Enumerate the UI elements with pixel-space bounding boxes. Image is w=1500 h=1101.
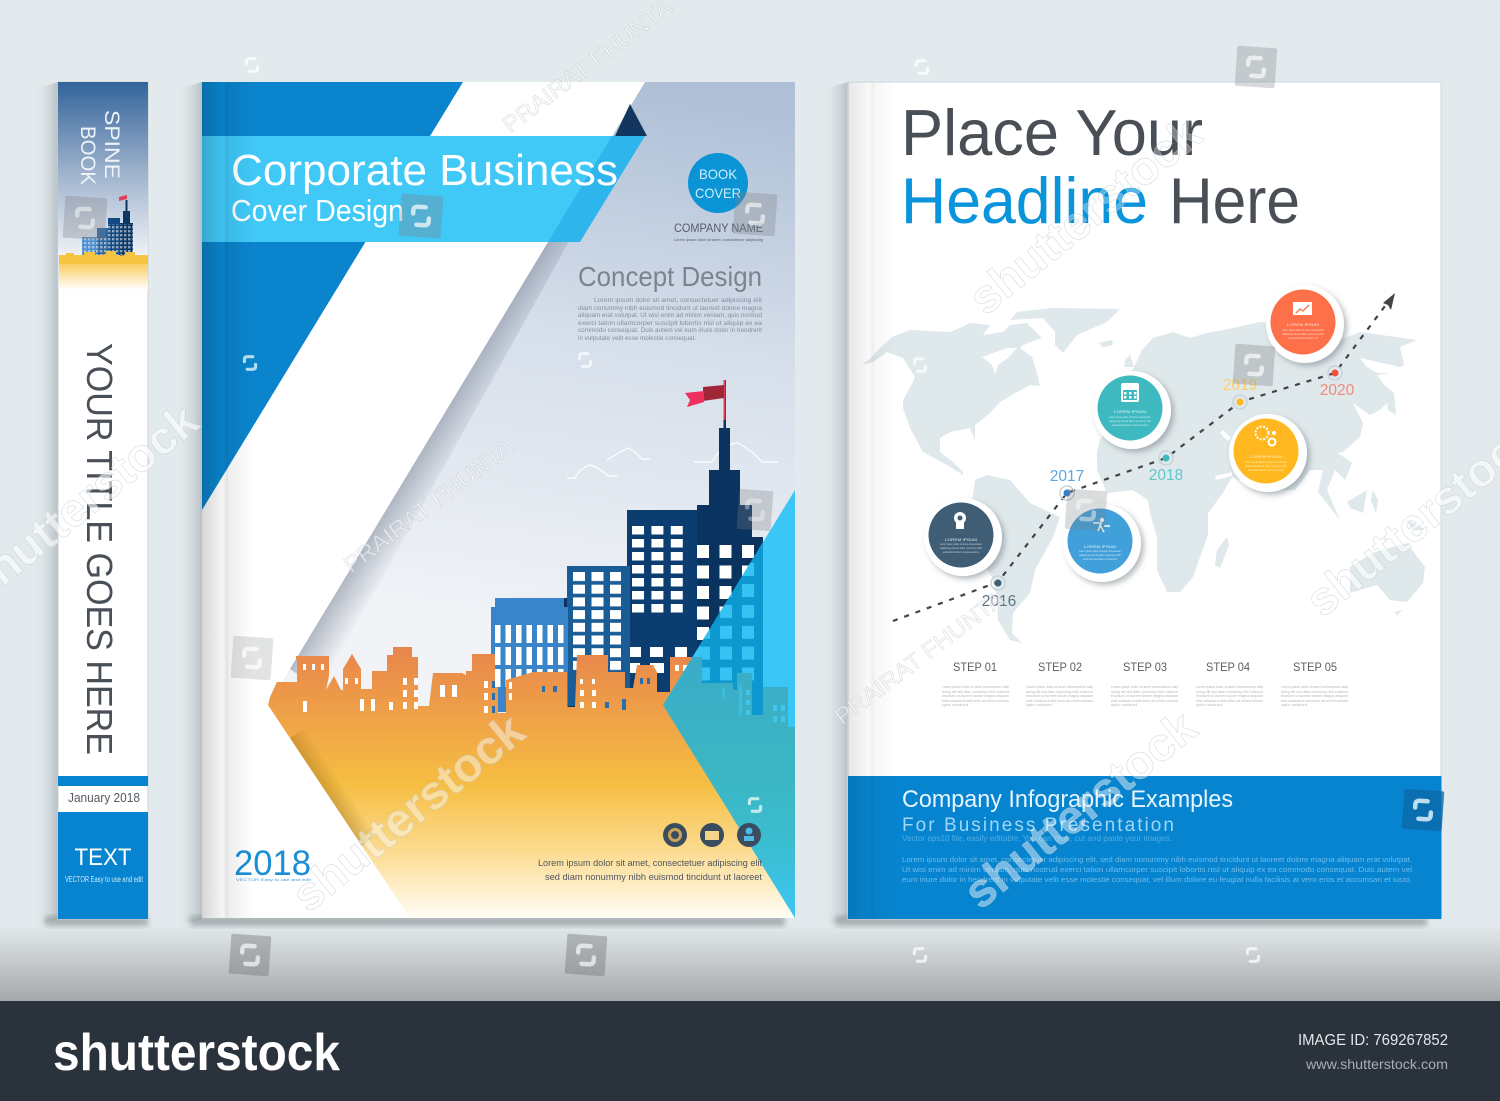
circle: step 2: euismod tincidunt ut laoreet [1083, 558, 1117, 561]
flag [685, 380, 726, 420]
concept design text: in vulputate velit esse molestie consequat. [578, 336, 696, 342]
step text blocks: Lorem ipsum dolor sit amet consectetuer adip [1111, 684, 1179, 689]
company name [674, 221, 763, 242]
company name: COMPANY NAME [674, 221, 763, 235]
timeline dashed arrow [893, 293, 1395, 621]
circle: step 2: Lorem ipsum dolor sit amet consectetuer [1079, 550, 1121, 553]
watermark texts: shutterstock [958, 105, 1212, 325]
circle: step 2: adipiscing elit sed diam nonummy nibh [1079, 554, 1122, 557]
world map [862, 308, 1427, 643]
circle: step 5: euismod tincidunt ut [1288, 337, 1318, 340]
step text blocks: iscing elit sed diam nonummy nibh euismod [1196, 689, 1263, 694]
cover year: VECTOR Easy to use and edit [236, 877, 312, 882]
blue corner triangle [202, 82, 463, 510]
cover bottom text [538, 858, 763, 882]
spine yellow fade [59, 255, 148, 290]
circle: step 5 [1266, 285, 1344, 363]
panel: back cover [848, 82, 1442, 919]
step text blocks: erat volutpat ut wisi enim ad minim veniam [1196, 698, 1264, 703]
step text blocks: tincidunt ut laoreet dolore magna aliquam [1281, 693, 1349, 698]
headline: Place Your [901, 96, 1203, 169]
concept design text: exerci tation ullamcorper suscipit lobortis nisl ut aliquip ex ea [578, 321, 763, 327]
cover subtitle: Cover Design [231, 193, 404, 228]
spine footer block [58, 812, 148, 919]
step text blocks: erat volutpat ut wisi enim ad minim veniam [1281, 698, 1349, 703]
orange skyline and ground [268, 647, 795, 918]
spine date: January 2018 [68, 791, 140, 805]
floor [0, 925, 1500, 1001]
step labels: STEP 03 [1123, 660, 1167, 674]
circle: step 1: Lorem ipsum dolor sit amet consectetuer [940, 543, 982, 546]
circle: step 3: adipiscing elit sed diam nonummy nibh [1109, 420, 1152, 423]
circle: step 3: euismod tincidunt ut laoreet dolore [1112, 424, 1149, 427]
panel: front cover [202, 82, 795, 918]
title band [202, 136, 645, 242]
concept design text: Lorem ipsum dolor sit amet, consectetuer adipiscing elit [594, 298, 762, 304]
step text blocks: iscing elit sed diam nonummy nibh euismod [1026, 689, 1093, 694]
step text blocks: tincidunt ut laoreet dolore magna aliquam [1111, 693, 1179, 698]
circle: step 1 [924, 498, 1002, 576]
circle: step 3: LOREM IPSUM [1114, 409, 1146, 414]
circle: step 4: euismod tincidunt ut laoreet dolore [1248, 469, 1285, 472]
year labels [982, 377, 1355, 610]
footer lorem [902, 855, 1412, 884]
step text blocks [942, 684, 1349, 707]
watermark logos [244, 59, 1429, 961]
step text blocks: Lorem ipsum dolor sit amet consectetuer adip [1281, 684, 1349, 689]
circle: step 3 [1093, 371, 1171, 449]
step text blocks: quis nostrud [942, 702, 968, 707]
concept design text: commodo consequat. Duis autem vel eum iriure dolor in hendrerit [578, 328, 762, 334]
spine footer block: VECTOR Easy to use and edit [65, 875, 144, 884]
cover bottom text: sed diam nonummy nibh euismod tincidunt ut laoreet [545, 872, 763, 882]
teal ghost skyline [650, 657, 795, 918]
bottom bar [0, 1001, 1500, 1101]
spine top gradient [58, 82, 148, 255]
book cover badge: BOOK [699, 166, 738, 182]
cover year: 2018 [234, 844, 311, 883]
circle: step 5: Lorem ipsum dolor sit amet consectetuer [1282, 329, 1324, 332]
footer lorem: Lorem ipsum dolor sit amet, consectetuer adipiscing elit, sed diam nonummy nibh euismod tincidunt ut laoreet dolore magna aliquam erat volutpat. [902, 855, 1412, 864]
step text blocks: iscing elit sed diam nonummy nibh euismod [942, 689, 1009, 694]
circle: step 1: adipiscing elit sed diam nonummy nibh [940, 547, 983, 550]
step text blocks: quis nostrud [1281, 702, 1307, 707]
headline: Headline [901, 164, 1148, 237]
shutterstock logotype: shutterstock [53, 1024, 340, 1082]
circle: step 4: LOREM IPSUM [1250, 454, 1282, 459]
step text blocks: quis nostrud [1026, 702, 1052, 707]
step text blocks: erat volutpat ut wisi enim ad minim veniam [1026, 698, 1094, 703]
year labels: 2018 [1149, 467, 1183, 484]
headline [901, 96, 1300, 237]
spine footer block: TEXT [74, 844, 132, 871]
concept design text: diam nonummy nibh euismod tincidunt ut laoreet dolore magna [578, 306, 763, 312]
circle: step 4 [1229, 414, 1307, 492]
cyan triangle [650, 490, 795, 918]
watermark texts: PRAIRAT FHUNTA [830, 585, 1009, 730]
ghost tower through cyan [698, 540, 763, 716]
step labels: STEP 01 [953, 660, 997, 674]
company name: Lorem ipsum dolor sit amet, consectetuer adipiscing [674, 237, 763, 242]
concept design text: aliquam erat volutpat. Ut wisi enim ad minim veniam, quis nostrud [578, 313, 762, 319]
step labels: STEP 05 [1293, 660, 1337, 674]
spine heading [76, 110, 123, 185]
skyline: blue buildings [491, 380, 763, 712]
circle: step 2: LOREM IPSUM [1084, 544, 1116, 549]
circle: step 2 [1063, 504, 1141, 582]
blue footer band [848, 776, 1442, 919]
step text blocks: tincidunt ut laoreet dolore magna aliquam [1196, 693, 1264, 698]
circle: step 1: LOREM IPSUM [945, 537, 977, 542]
year labels: 2019 [1223, 377, 1257, 394]
step text blocks: quis nostrud [1111, 702, 1137, 707]
concept design heading: Concept Design [578, 261, 762, 292]
circle: step 4: Lorem ipsum dolor sit amet consectetuer [1245, 461, 1287, 464]
spine mini city [59, 195, 148, 264]
watermark texts: PRAIRAT FHUNTA [498, 0, 677, 138]
circle: step 5: adipiscing elit sed diam nonummy nibh [1282, 333, 1325, 336]
book cover badge [688, 153, 748, 213]
image id: IMAGE ID: 769267852 [1298, 1032, 1448, 1049]
year labels: 2020 [1320, 382, 1355, 399]
step labels: STEP 02 [1038, 660, 1082, 674]
back cover fold [848, 82, 896, 919]
website: www.shutterstock.com [1305, 1056, 1448, 1072]
step text blocks: Lorem ipsum dolor sit amet consectetuer adip [1196, 684, 1264, 689]
step text blocks: erat volutpat ut wisi enim ad minim veniam [1111, 698, 1179, 703]
step text blocks: tincidunt ut laoreet dolore magna aliquam [1026, 693, 1094, 698]
step text blocks: erat volutpat ut wisi enim ad minim veniam [942, 698, 1010, 703]
map ocean cut-outs [982, 348, 1400, 480]
footer lorem: Ut wisi enim ad minim veniam, quis nostrud exerci tation ullamcorper suscipit lobortis nisl ut aliquip ex ea commodo consequat. Duis autem vel [902, 865, 1412, 874]
navy triangle [615, 104, 647, 136]
book cover badge: COVER [695, 185, 741, 201]
step text blocks: iscing elit sed diam nonummy nibh euismod [1111, 689, 1178, 694]
spine heading: SPINE [100, 110, 123, 179]
panel: book spine [58, 82, 148, 919]
footer note: Vector eps10 file, easily editable. You can crop, cut and paste your images. [902, 834, 1172, 843]
icons: globe, briefcase, person [663, 823, 761, 847]
diagonal shadow [290, 156, 612, 690]
step labels [953, 660, 1337, 674]
step text blocks: Lorem ipsum dolor sit amet consectetuer adip [942, 684, 1010, 689]
watermark texts: shutterstock [281, 702, 535, 922]
watermark squares [63, 46, 1444, 976]
circle: step 4: adipiscing elit sed diam nonummy nibh [1245, 465, 1288, 468]
clouds [567, 443, 778, 478]
year labels: 2017 [1050, 468, 1084, 485]
step text blocks: tincidunt ut laoreet dolore magna aliquam [942, 693, 1010, 698]
step text blocks: quis nostrud [1196, 702, 1222, 707]
spine heading: BOOK [76, 126, 99, 185]
concept design text [578, 298, 763, 342]
step text blocks: Lorem ipsum dolor sit amet consectetuer adip [1026, 684, 1094, 689]
cover bottom text: Lorem ipsum dolor sit amet, consectetuer adipiscing elit [538, 858, 762, 868]
orange edge shadow [290, 722, 386, 846]
footer lorem: eum iriure dolor in hendrerit in vulputate velit esse molestie consequat, vel illum dolore eu feugiat nulla facilisis at vero eros et accumsan et iusto. [902, 875, 1412, 884]
book shadows [33, 82, 1427, 926]
watermark texts: shutterstock [953, 699, 1207, 919]
circle: step 1: euismod tincidunt ut laoreet dolore [943, 551, 980, 554]
circle: step 5: LOREM IPSUM [1287, 322, 1319, 327]
cover fold [202, 82, 253, 918]
cover title: Corporate Business [231, 146, 618, 195]
sky background [268, 82, 795, 918]
spine blue stripe [58, 776, 148, 786]
year labels: 2016 [982, 593, 1016, 610]
headline: Here [1169, 164, 1300, 237]
step labels: STEP 04 [1206, 660, 1250, 674]
circle: step 3: Lorem ipsum dolor sit amet consectetuer [1109, 416, 1151, 419]
watermark texts: PRAIRAT FHUNTA [339, 433, 518, 578]
step text blocks: iscing elit sed diam nonummy nibh euismod [1281, 689, 1348, 694]
footer heading: Company Infographic Examples [902, 786, 1233, 813]
timeline markers [991, 366, 1342, 590]
spine title: YOUR TITLE GOES HERE [79, 343, 120, 755]
footer subheading: For Business Presentation [902, 815, 1174, 836]
